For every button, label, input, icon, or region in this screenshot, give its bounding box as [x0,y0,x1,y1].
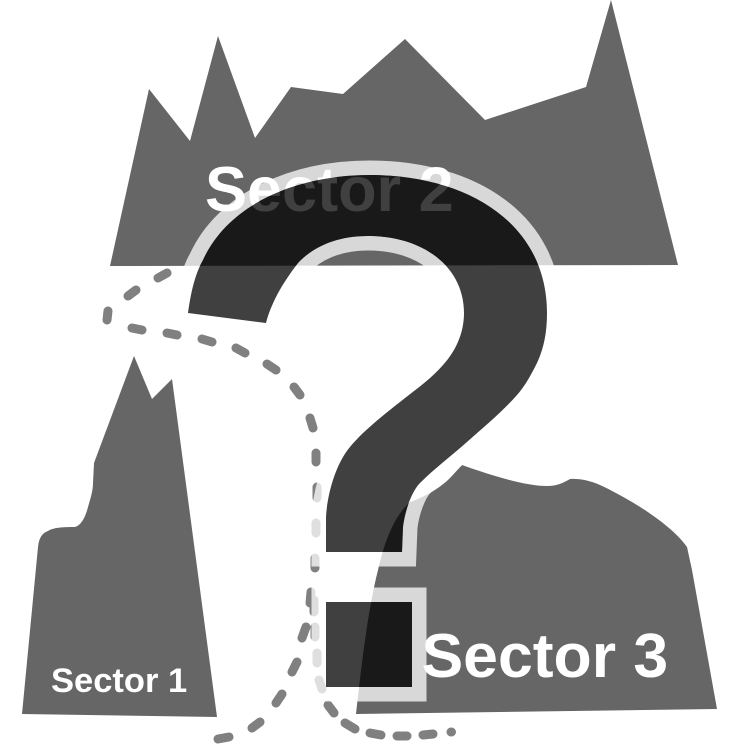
label: Sector 1: Sector 1 [51,662,187,700]
label: Sector 3: Sector 3 [422,621,668,691]
sector 2 landmass [110,0,678,266]
dashed route lines [107,273,452,739]
sector 3 landmass [356,465,717,714]
question mark halo [188,175,547,687]
question mark [188,175,547,687]
label: Sector 2: Sector 2 [205,155,454,225]
sector 1 landmass [22,356,217,717]
